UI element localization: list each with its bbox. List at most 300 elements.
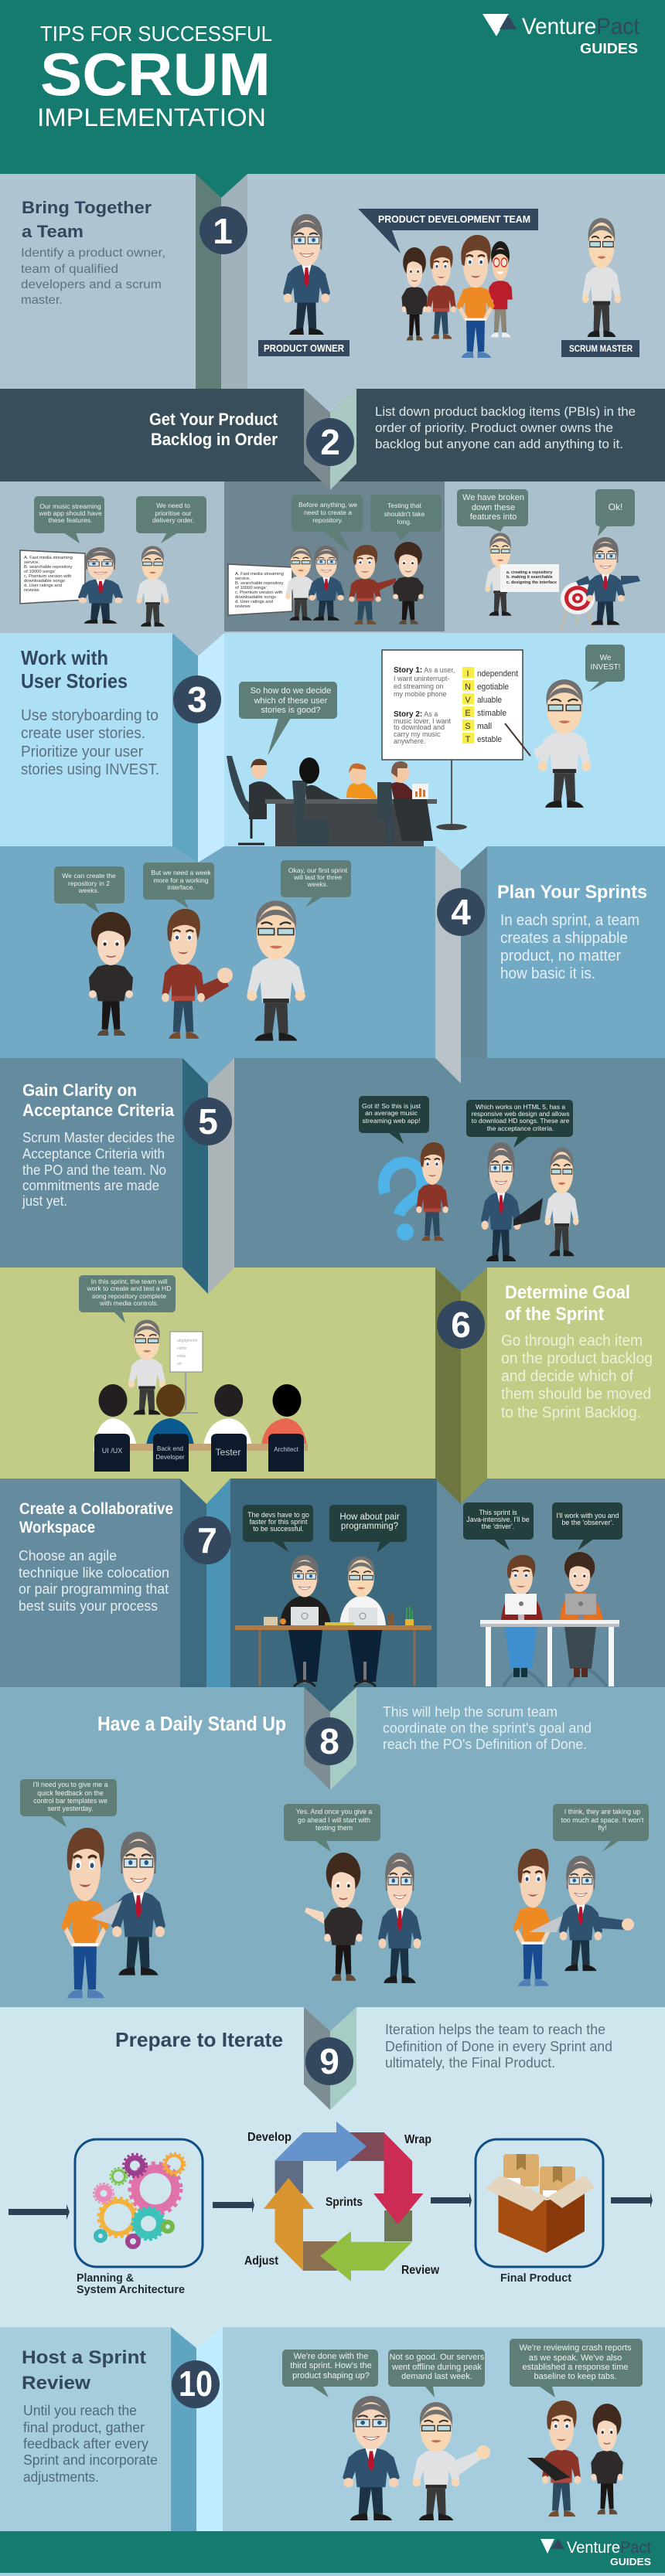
body text: them should be moved (501, 1386, 651, 1403)
character: product owner (343, 2396, 400, 2520)
chart: sprint cycle: Sprints (326, 2196, 363, 2209)
speech bubble: two weeks: repository in 2 (68, 880, 110, 887)
body text: Choose an agile (19, 1548, 117, 1564)
footer (0, 2531, 665, 2573)
speech bubble: pair programming: How about pair (339, 1513, 400, 1522)
body text: Iteration helps the team to reach the (385, 2022, 605, 2037)
heading: determine goal of the sprint: Determine Goal (505, 1282, 630, 1303)
flip chart: eefds (177, 1346, 187, 1351)
logo: VenturePact Guides: GUIDES (580, 41, 638, 56)
heading: work with user stories (21, 646, 128, 692)
logo: VenturePact Guides (483, 14, 640, 56)
number badge 5 (184, 1097, 232, 1145)
number badge 6 (437, 1301, 485, 1349)
whiteboard: stories and INVEST: N (465, 682, 471, 692)
whiteboard: stories and INVEST: I (466, 669, 469, 679)
panel: step 3 user stories (0, 633, 665, 863)
title: TIPS FOR SUCCESSFUL (40, 22, 272, 46)
character: scrum master (544, 1148, 579, 1256)
speech bubble: we invest: INVEST! (591, 663, 620, 672)
speech bubble: driver: Java-intensive. I'll be (466, 1516, 530, 1523)
audience: team members seated: UI /UX (102, 1447, 122, 1455)
body text: coordinate on the sprint's goal and (383, 1720, 592, 1736)
title: IMPLEMENTATION (37, 104, 266, 131)
speech bubble: testing (284, 1804, 380, 1852)
character: developer hands on ears (89, 912, 133, 1036)
illustration: pair programming at wooden desk (235, 1555, 431, 1686)
number badge 1: 1 (213, 211, 233, 251)
body text: reach the PO's Definition of Done. (383, 1737, 587, 1752)
whiteboard: stories and INVEST: to download and (394, 723, 445, 731)
body text: and decide which of (501, 1368, 633, 1385)
body text: ultimately, the Final Product. (385, 2055, 555, 2071)
speech bubble: driver: the 'driver'. (482, 1523, 514, 1530)
arrow: to final product (431, 2193, 472, 2208)
speech bubble: got it (359, 1096, 429, 1144)
speech bubble: testing: testing them (315, 1824, 353, 1832)
body text (375, 404, 636, 451)
panel: step 9 prepare to iterate (0, 2007, 665, 2327)
number badge 6: 6 (451, 1305, 471, 1345)
whiteboard: feature list: service. (24, 560, 39, 565)
fold ribbon 5 (182, 1058, 234, 1294)
body text: commitments are made (22, 1178, 159, 1193)
flip chart (170, 1332, 203, 1413)
fold ribbon 8 (304, 1687, 356, 1790)
speech bubble: question: which of these user (254, 696, 328, 706)
speech bubble: observer: be the 'observer'. (562, 1519, 613, 1526)
number badge 4: 4 (451, 892, 471, 932)
number badge 1 (200, 206, 247, 254)
number badge 9: 9 (319, 2041, 339, 2081)
whiteboard: stories and INVEST: ed streaming on (394, 682, 444, 690)
body text: on the product backlog (501, 1350, 653, 1367)
speech bubble: testing (370, 495, 442, 540)
whiteboard: feature list: service. (235, 577, 251, 581)
audience: team members seated: Back end (157, 1445, 184, 1452)
character: scrum master with sheet (485, 533, 516, 616)
character: developer thinking (416, 1142, 448, 1240)
body text: creates a shippable (500, 930, 628, 947)
body text (23, 2403, 158, 2485)
speech bubble: question (239, 682, 337, 756)
speech bubble: repository (292, 495, 363, 553)
body text (21, 707, 159, 778)
speech bubble: ad space: too much ad space. It won't (561, 1816, 644, 1824)
whiteboard: stories and INVEST: E (465, 709, 471, 718)
speech bubble: sprint plan: In this sprint, the team will (91, 1278, 168, 1285)
speech bubble: feedback: quick feedback on the (37, 1789, 104, 1797)
character: scrum master (582, 218, 621, 337)
character: developer with clipboard (527, 2401, 581, 2516)
speech bubble: testing: shouldn't take (384, 510, 425, 518)
speech bubble: acceptance criteria: responsive web design and allows (471, 1110, 570, 1118)
whiteboard: stories and INVEST: music lover, I want (394, 717, 452, 725)
speech bubble: extra week: more for a working (153, 876, 209, 884)
fold ribbon 6 (435, 1268, 487, 1504)
body text: This will help the scrum team (383, 1704, 558, 1720)
speech bubble: feedback (20, 1779, 117, 1827)
speech bubble: go faster: to be successful. (253, 1525, 304, 1533)
speech bubble: servers offline: went offline during peak (391, 2363, 482, 2372)
characters: scrum team discussion (285, 542, 424, 624)
speech bubble: got it: Got it! So this is just (362, 1102, 421, 1110)
logo: VenturePact Guides footer: VenturePact (567, 2539, 651, 2557)
body text: final product, gather (23, 2420, 145, 2435)
body text: backlog but anyone can add anything to it. (375, 437, 623, 451)
whiteboard: stories and INVEST: my mobile phone (394, 690, 447, 698)
whiteboard: stories and INVEST: estable (477, 735, 502, 744)
character: product owner at target (576, 537, 640, 625)
body text: In each sprint, a team (500, 912, 639, 929)
number badge 10: 10 (179, 2363, 213, 2404)
body text: Prioritize your user (21, 744, 143, 761)
character: developer red sweater (162, 909, 233, 1039)
speech bubble: acceptance criteria: to download HD songs. These are (472, 1117, 570, 1125)
label: product owner: PRODUCT OWNER (264, 342, 345, 354)
number badge 7 (183, 1516, 231, 1564)
body text: best suits your process (19, 1598, 158, 1614)
whiteboard: feature list: reviews (235, 604, 251, 609)
heading: determine goal of the sprint: of the Sprint (505, 1304, 604, 1325)
speech bubble: three weeks: weeks. (307, 880, 328, 888)
heading: plan your sprints: Plan Your Sprints (497, 882, 647, 903)
speech bubble: we invest (585, 645, 625, 692)
speech bubble: observer (552, 1502, 622, 1550)
speech bubble: prioritise: delivery order. (152, 516, 194, 524)
speech bubble: sprint plan: song repository complete (92, 1292, 166, 1300)
heading: Bring Together a Team: Bring Together (22, 198, 152, 217)
whiteboard: stories and INVEST: S (465, 722, 471, 731)
illustration: pair programming at white desk (480, 1552, 619, 1686)
label: scrum master (561, 340, 639, 357)
whiteboard: stories and INVEST: V (465, 696, 471, 705)
speech bubble: pair programming: programming? (341, 1522, 398, 1531)
panel: step 2 product backlog (0, 389, 665, 633)
label: product owner (258, 340, 350, 356)
body text: stories using INVEST. (21, 761, 159, 778)
character: scrum master thinking (247, 900, 305, 1041)
speech bubble: feedback: control bar templates we (33, 1797, 107, 1805)
speech bubble: features: these features. (49, 516, 92, 524)
callout: product development team (358, 209, 538, 254)
speech bubble: testing: Testing that (387, 502, 422, 509)
body text (383, 1704, 592, 1752)
heading: Bring Together a Team: a Team (22, 222, 84, 241)
heading: get your product backlog in order: Backlog in Order (151, 430, 278, 449)
number badge 2 (306, 418, 354, 466)
speech bubble: prioritise: prioritise our (155, 509, 192, 517)
characters: tester and product owner (305, 1853, 421, 1983)
panel: header (0, 0, 665, 174)
whiteboard: feature list: A. Fast media streaming (235, 572, 284, 577)
speech bubble: testing: Yes. And once you give a (296, 1808, 372, 1815)
body text: Go through each item (501, 1332, 643, 1349)
panel: step 5 acceptance criteria (0, 1058, 665, 1294)
heading: gain clarity on acceptance criteria: Acceptance Criteria (22, 1101, 175, 1120)
body text: master. (21, 294, 63, 307)
heading: work with user stories: User Stories (21, 669, 128, 692)
whiteboard: feature list: of 10000 songs' (24, 570, 56, 574)
fold ribbon 10 (171, 2327, 223, 2531)
body text (385, 2022, 612, 2071)
body text: order of priority. Product owner owns the (375, 420, 613, 435)
body text: Definition of Done in every Sprint and (385, 2039, 612, 2054)
whiteboard: stories and INVEST: aluable (477, 696, 502, 705)
whiteboard: stories and INVEST: stimable (477, 709, 506, 718)
speech bubble: repository: repository. (312, 516, 343, 524)
whiteboard: feature list: c. Premium version with (235, 590, 283, 595)
heading: host a sprint review: Host a Sprint (22, 2347, 146, 2368)
speech bubble: extra week: But we need a week (151, 869, 211, 876)
speech bubble: extra week: interface. (167, 883, 195, 891)
speech bubble: go faster: The devs have to go (247, 1511, 309, 1519)
character: scrum master with pointer (505, 679, 591, 808)
character: product owner presenting (78, 547, 123, 624)
whiteboard: feature list: d. User ratings and (235, 600, 273, 604)
whiteboard: stories and INVEST: anywhere. (394, 737, 426, 745)
speech bubble: feedback: I'll need you to give me a (32, 1781, 108, 1788)
label: planning and system architecture: Planning & (77, 2271, 134, 2285)
heading: have a daily stand up: Have a Daily Stand Up (97, 1712, 286, 1735)
speech bubble: sprint plan: work to create and test a HD (87, 1285, 171, 1292)
title (37, 22, 272, 131)
chart: sprint cycle (244, 2122, 439, 2282)
body text: or pair programming that (19, 1581, 169, 1597)
body text: technique like colocation (19, 1565, 169, 1581)
chart: sprint cycle: Wrap (404, 2133, 431, 2146)
body text (21, 247, 165, 307)
speech bubble: three weeks: Okay, our first sprint (288, 866, 348, 874)
whiteboard: feature list (228, 564, 292, 615)
whiteboard: feature list (20, 550, 85, 604)
heading: Bring Together a Team (22, 198, 152, 241)
character: scrum master presenting (128, 1320, 165, 1414)
number badge 2: 2 (320, 422, 340, 462)
speech bubble: product shaping: third sprint. How's the (290, 2361, 372, 2370)
heading: determine goal of the sprint (505, 1282, 630, 1325)
speech bubble: three weeks (281, 860, 351, 907)
character: scrum master (136, 546, 169, 627)
speech bubble: two weeks (54, 866, 124, 914)
speech bubble: broken down (457, 489, 528, 532)
whiteboard: stories and INVEST: Story 1: As a user, (394, 666, 455, 675)
flip chart: edep (177, 1354, 186, 1359)
body text: Until you reach the (23, 2403, 137, 2418)
number badge 3: 3 (187, 679, 207, 720)
body text: Acceptance Criteria with (22, 1146, 165, 1162)
fold ribbon 4 (435, 846, 487, 1084)
body text: the PO and the team. No (22, 1162, 166, 1178)
whiteboard: stories and INVEST: I want uninterrupt- (394, 675, 450, 682)
heading: get your product backlog in order: Get Your Product (149, 410, 278, 429)
audience: team members seated (94, 1384, 308, 1472)
speech bubble: two weeks: We can create the (62, 872, 116, 880)
speech bubble: we invest: We (600, 654, 612, 662)
speech bubble: ok: Ok! (609, 502, 622, 512)
speech bubble: features (34, 496, 104, 543)
speech bubble: broken down: features into (470, 512, 517, 522)
number badge 7: 7 (197, 1520, 217, 1560)
speech bubble: acceptance criteria: the acceptance criteria. (487, 1125, 554, 1132)
number badge 8: 8 (319, 1721, 339, 1761)
whiteboard: stories and INVEST: carry my music (394, 730, 441, 738)
chart: sprint cycle: Adjust (244, 2254, 279, 2268)
speech bubble: crash reports (510, 2339, 643, 2397)
box: planning and system architecture (75, 2139, 203, 2267)
speech bubble: product shaping: product shaping up? (292, 2371, 370, 2380)
speech bubble: crash reports: established a response time (523, 2363, 628, 2372)
body text (22, 1130, 175, 1209)
speech bubble: pair programming (329, 1505, 407, 1553)
body text: just yet. (22, 1193, 67, 1209)
speech bubble: question: stories is good? (261, 706, 321, 715)
flip chart: ad (177, 1362, 182, 1366)
number badge 8 (305, 1717, 353, 1765)
logo: VenturePact Guides footer (541, 2539, 651, 2567)
panel: step 10 sprint review (0, 2327, 665, 2531)
speech bubble: feedback: sent yesterday. (47, 1805, 94, 1812)
body text (500, 912, 639, 982)
audience: team members seated: Tester (216, 1447, 240, 1458)
heading: gain clarity on acceptance criteria (22, 1080, 175, 1120)
whiteboard: stories and INVEST: ndependent (477, 669, 518, 679)
body text: Use storyboarding to (21, 707, 159, 724)
heading: get your product backlog in order (149, 410, 278, 449)
body text: product, no matter (500, 948, 621, 965)
sheet: task list (500, 564, 559, 592)
character: product owner with laptop (481, 1142, 543, 1261)
body text: developers and a scrum (21, 278, 162, 291)
whiteboard: stories and INVEST: Story 2: As a (394, 710, 438, 719)
heading: create a collaborative workspace: Workspace (19, 1519, 95, 1536)
speech bubble: features: web app should have (38, 509, 102, 517)
label: scrum master: SCRUM MASTER (569, 343, 633, 354)
icon: target (561, 582, 595, 630)
whiteboard: stories and INVEST: egotiable (477, 682, 509, 692)
speech bubble: crash reports: as we speak. We've also (529, 2353, 622, 2363)
number badge 10 (172, 2360, 220, 2408)
fold ribbon 9 (304, 2007, 356, 2110)
heading: host a sprint review (22, 2347, 146, 2394)
speech bubble: product shaping (282, 2350, 378, 2397)
body text: feedback after every (23, 2436, 148, 2452)
characters: developer and product owner (61, 1828, 165, 1998)
title: SCRUM (40, 40, 271, 108)
speech bubble: testing: long. (397, 518, 411, 526)
number badge 5: 5 (198, 1101, 218, 1142)
body text: Identify a product owner, (21, 247, 165, 260)
speech bubble: got it: streaming web app! (362, 1117, 421, 1125)
callout: product development team: PRODUCT DEVELOPMENT TEAM (378, 213, 530, 225)
fold ribbon 2 (304, 389, 356, 490)
speech bubble: broken down: down these (472, 503, 515, 512)
label: final product: Final Product (500, 2271, 571, 2285)
characters: developer and product owner discussing (513, 1849, 634, 1986)
heading: work with user stories: Work with (21, 646, 108, 669)
speech bubble: crash reports: We're reviewing crash reports (520, 2343, 632, 2353)
number badge 4 (437, 888, 485, 936)
speech bubble: ad space: I think, they are taking up (564, 1808, 640, 1815)
whiteboard: stories and INVEST: T (466, 735, 471, 744)
speech bubble: repository: Before anything, we (298, 501, 357, 509)
character: product owner (283, 214, 330, 335)
logo: VenturePact Guides footer: GUIDES (610, 2556, 651, 2567)
whiteboard: feature list: of 10000 songs' (235, 586, 267, 590)
flip chart: abgdghmhn (177, 1339, 198, 1343)
speech bubble: go faster (243, 1505, 313, 1552)
speech bubble: observer: I'll work with you and (557, 1512, 619, 1519)
audience: team members seated: Developer (155, 1454, 185, 1461)
fold ribbon 7 (180, 1479, 230, 1687)
speech bubble: servers offline (388, 2350, 485, 2397)
body text (501, 1332, 653, 1421)
speech bubble: driver (463, 1502, 534, 1550)
character: tester (591, 2404, 623, 2514)
character: scrum master (412, 2402, 490, 2520)
speech bubble: broken down: We have broken (462, 493, 524, 502)
body text: adjustments. (23, 2469, 99, 2485)
chart: sprint cycle: Review (401, 2264, 439, 2277)
speech bubble: ad space (553, 1804, 649, 1852)
arrow: into planning (9, 2204, 70, 2220)
speech bubble: prioritise: We need to (156, 502, 190, 509)
panel: step 1 bring together a team (0, 174, 665, 389)
whiteboard: feature list: downloadable songs (24, 579, 65, 584)
speech bubble: ad space: fly! (598, 1824, 607, 1832)
panel: step 8 daily stand up (0, 1687, 665, 2007)
speech bubble: crash reports: baseline to keep tabs. (534, 2372, 617, 2381)
illustration: team at meeting table (227, 756, 437, 846)
speech bubble: extra week (143, 863, 214, 909)
heading: gain clarity on acceptance criteria: Gain Clarity on (22, 1080, 137, 1100)
heading: create a collaborative workspace (19, 1500, 173, 1536)
speech bubble: repository: need to create a (304, 509, 352, 516)
speech bubble: ok (595, 489, 635, 536)
fold ribbon 3 (172, 633, 224, 863)
speech bubble: product shaping: We're done with the (294, 2352, 368, 2361)
whiteboard: feature list: B. searchable repository (235, 581, 284, 586)
speech bubble: acceptance criteria (466, 1100, 573, 1148)
label: planning and system architecture (77, 2271, 185, 2296)
panel: step 4 plan your sprints (0, 846, 665, 1084)
logo: VenturePact Guides: VenturePact (522, 14, 640, 39)
number badge 9 (305, 2037, 353, 2085)
panel: step 7 collaborative workspace (0, 1479, 665, 1687)
whiteboard: feature list: downloadable songs (235, 595, 276, 600)
body text: to the Sprint Backlog. (501, 1404, 641, 1421)
speech bubble: acceptance criteria: Which works on HTML 5, has a (476, 1103, 565, 1111)
speech bubble: servers offline: Not so good. Our servers (390, 2353, 485, 2362)
speech bubble: prioritise (136, 496, 206, 543)
chart: sprint cycle: Develop (247, 2131, 292, 2144)
label: planning and system architecture: System Architecture (77, 2283, 185, 2296)
panel: step 6 sprint goal (0, 1268, 665, 1504)
speech bubble: got it: an average music (365, 1109, 418, 1117)
fold ribbon 1 (196, 174, 247, 389)
audience: team members seated: Architect (274, 1446, 299, 1453)
speech bubble: question: So how do we decide (251, 686, 331, 696)
body text: Sprint and incorporate (23, 2452, 158, 2468)
heading: prepare to iterate: Prepare to Iterate (115, 2028, 283, 2051)
sheet: task list: b. making it searchable (506, 575, 553, 580)
body text (19, 1548, 169, 1614)
sheet: task list: c. designing the interface (506, 580, 557, 585)
arrow: to sprints (213, 2197, 254, 2213)
speech bubble: go faster: faster for this sprint (250, 1518, 308, 1526)
speech bubble: three weeks: will last for three (293, 873, 342, 881)
whiteboard: feature list: B. searchable repository (24, 565, 73, 570)
